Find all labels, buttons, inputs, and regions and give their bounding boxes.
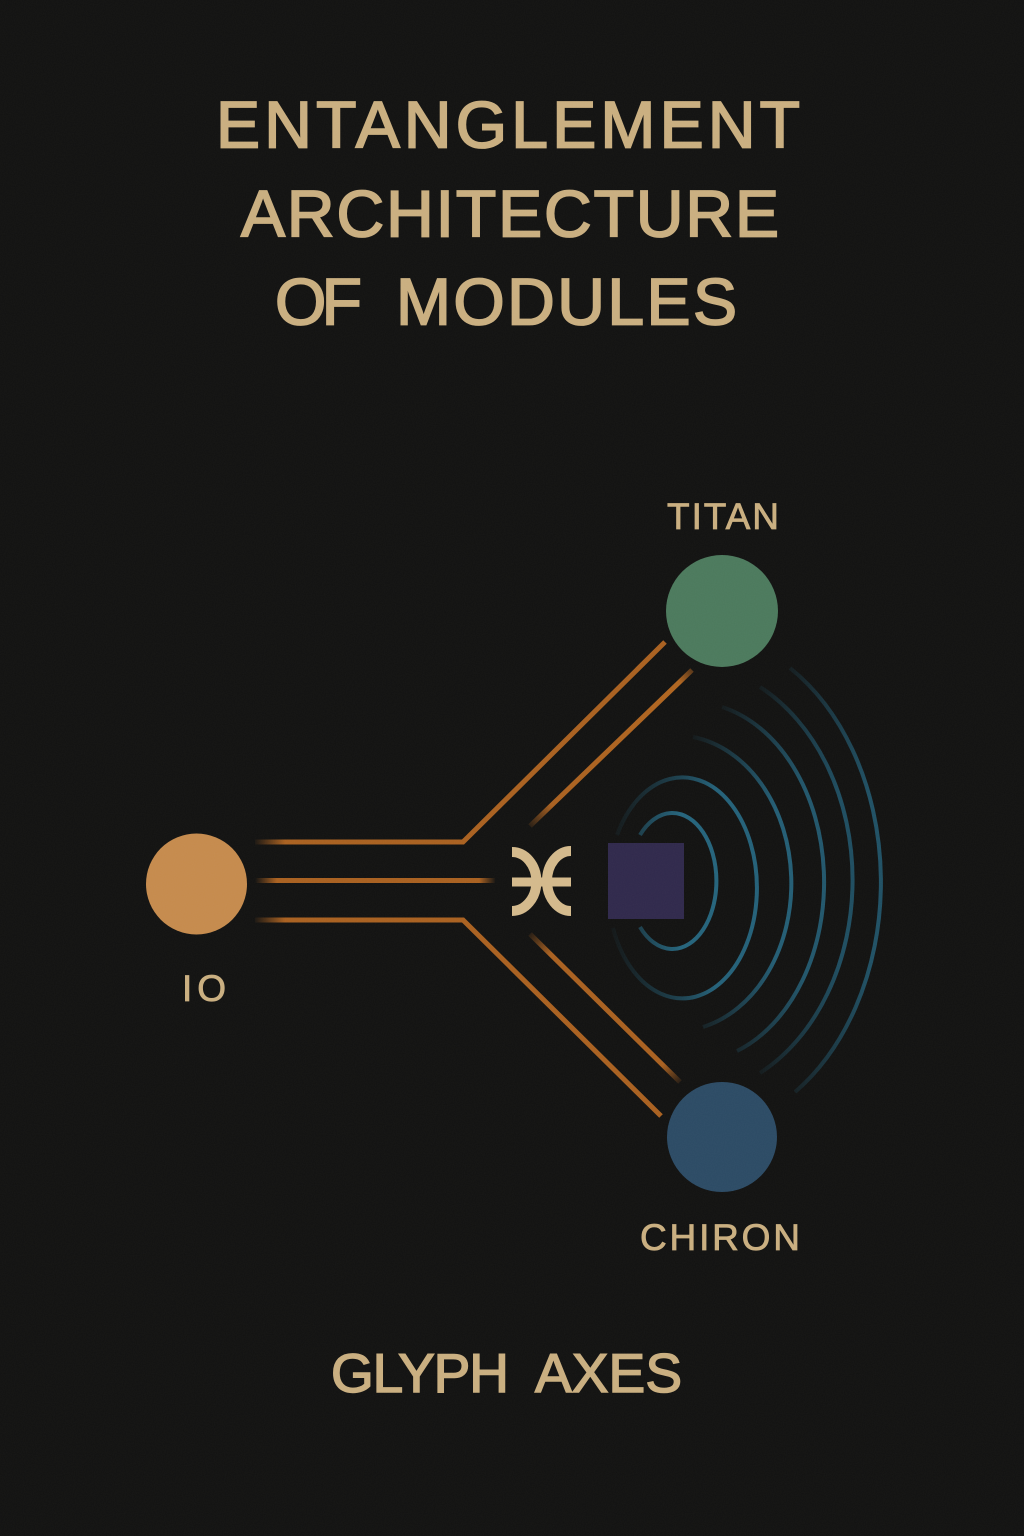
glyph axes symbol — [512, 851, 571, 911]
footer: Glyph Axes — [331, 1342, 682, 1404]
label: Titan: TITAN — [667, 496, 779, 537]
node: Titan — [666, 555, 778, 667]
label: Chiron: CHIRON — [640, 1217, 800, 1258]
footer: Glyph Axes: GLYPH — [331, 1342, 509, 1404]
title: ENTANGLEMENT — [216, 88, 800, 162]
node: Chiron — [667, 1082, 777, 1192]
connector lines: orange channels — [255, 642, 692, 1116]
title — [216, 88, 800, 338]
module square — [608, 843, 684, 919]
footer: Glyph Axes: AXES — [535, 1342, 682, 1404]
title: ARCHITECTURE — [241, 176, 779, 250]
title: OF — [275, 264, 362, 338]
label: Io: IO — [182, 968, 226, 1009]
title: MODULES — [396, 264, 737, 338]
concentric wave arcs — [613, 668, 881, 1092]
node: Io — [146, 834, 247, 934]
